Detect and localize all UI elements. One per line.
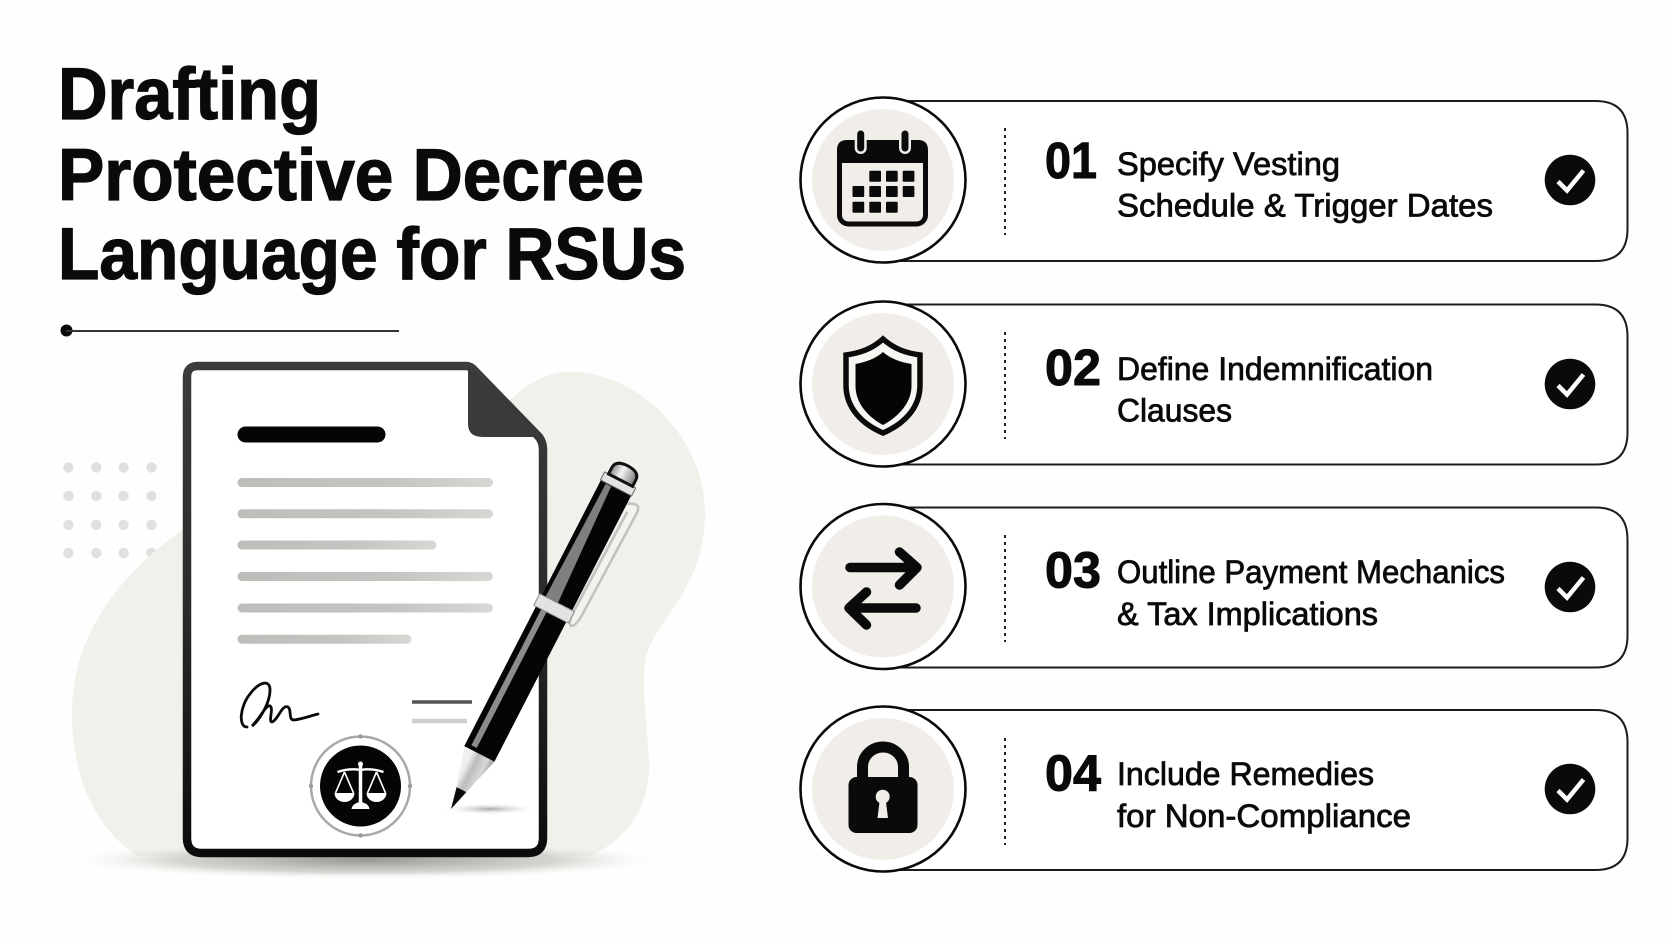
step 4 icon circle [800, 706, 966, 872]
step 1 text [1117, 146, 1493, 224]
step 2 text: Define Indemnification [1117, 351, 1433, 387]
step 4 dotted divider [1004, 738, 1006, 845]
step 4 row [800, 706, 1628, 872]
pen shadow [440, 803, 540, 815]
step 2 dotted divider [1004, 332, 1006, 439]
pen cone [446, 746, 494, 797]
step 3 number: 03 [1045, 542, 1101, 598]
step 4 text [1117, 756, 1411, 834]
step 4 text: Include Remedies [1117, 756, 1374, 792]
step 3 text [1117, 554, 1505, 632]
step 3 row [800, 504, 1628, 669]
icon: calendar [837, 134, 928, 224]
document sheet [187, 366, 543, 853]
step 4 number: 04 [1045, 744, 1102, 802]
step 2 row [800, 302, 1628, 466]
icon: padlock [848, 747, 918, 833]
icon: pen [434, 457, 654, 823]
step 3 pill [883, 508, 1628, 668]
step 3 dotted divider [1004, 535, 1006, 642]
title: Drafting [58, 54, 321, 135]
date lines [412, 702, 472, 721]
icon: shield [846, 339, 920, 433]
pen band [534, 594, 574, 623]
step 4 pill [883, 710, 1628, 870]
step 1 text: Specify Vesting [1117, 146, 1340, 182]
illustration: contract document [187, 366, 544, 853]
decorative dot grid [63, 462, 157, 558]
pen nib [447, 787, 466, 812]
step 2 icon circle [800, 302, 966, 466]
step 1 number: 01 [1045, 132, 1097, 189]
seal with scales of justice [309, 734, 412, 838]
step 2 check badge [1545, 359, 1595, 409]
title: Language for RSUs [58, 214, 686, 295]
pen knob [609, 460, 640, 486]
pen collar [600, 472, 636, 496]
step 2 text: Clauses [1117, 392, 1232, 428]
step 1 check badge [1545, 155, 1595, 205]
step 2 number: 02 [1045, 339, 1101, 396]
step 3 text: & Tax Implications [1117, 596, 1378, 632]
document heading bar [238, 426, 386, 442]
step 3 check badge [1545, 562, 1595, 612]
step 3 icon circle [800, 504, 966, 669]
step 1 icon circle [800, 98, 966, 262]
step 4 text: for Non-Compliance [1117, 798, 1411, 834]
title divider [60, 324, 399, 336]
title: Protective Decree [58, 135, 644, 216]
title [58, 54, 686, 295]
step 4 check badge [1545, 764, 1595, 814]
step 1 dotted divider [1004, 128, 1006, 235]
step 2 text [1117, 351, 1433, 428]
step 1 pill [883, 101, 1628, 261]
signature [241, 683, 318, 727]
background blob [72, 372, 705, 856]
document text lines [238, 478, 493, 644]
folded corner [468, 367, 544, 441]
icon: exchange arrows [849, 552, 917, 625]
step 1 row [800, 98, 1628, 262]
step 1 text: Schedule & Trigger Dates [1117, 188, 1493, 224]
step 3 text: Outline Payment Mechanics [1117, 554, 1505, 590]
pen barrel [464, 479, 632, 762]
step 2 pill [883, 304, 1628, 464]
pen clip [566, 501, 640, 629]
ground shadow [71, 841, 661, 879]
